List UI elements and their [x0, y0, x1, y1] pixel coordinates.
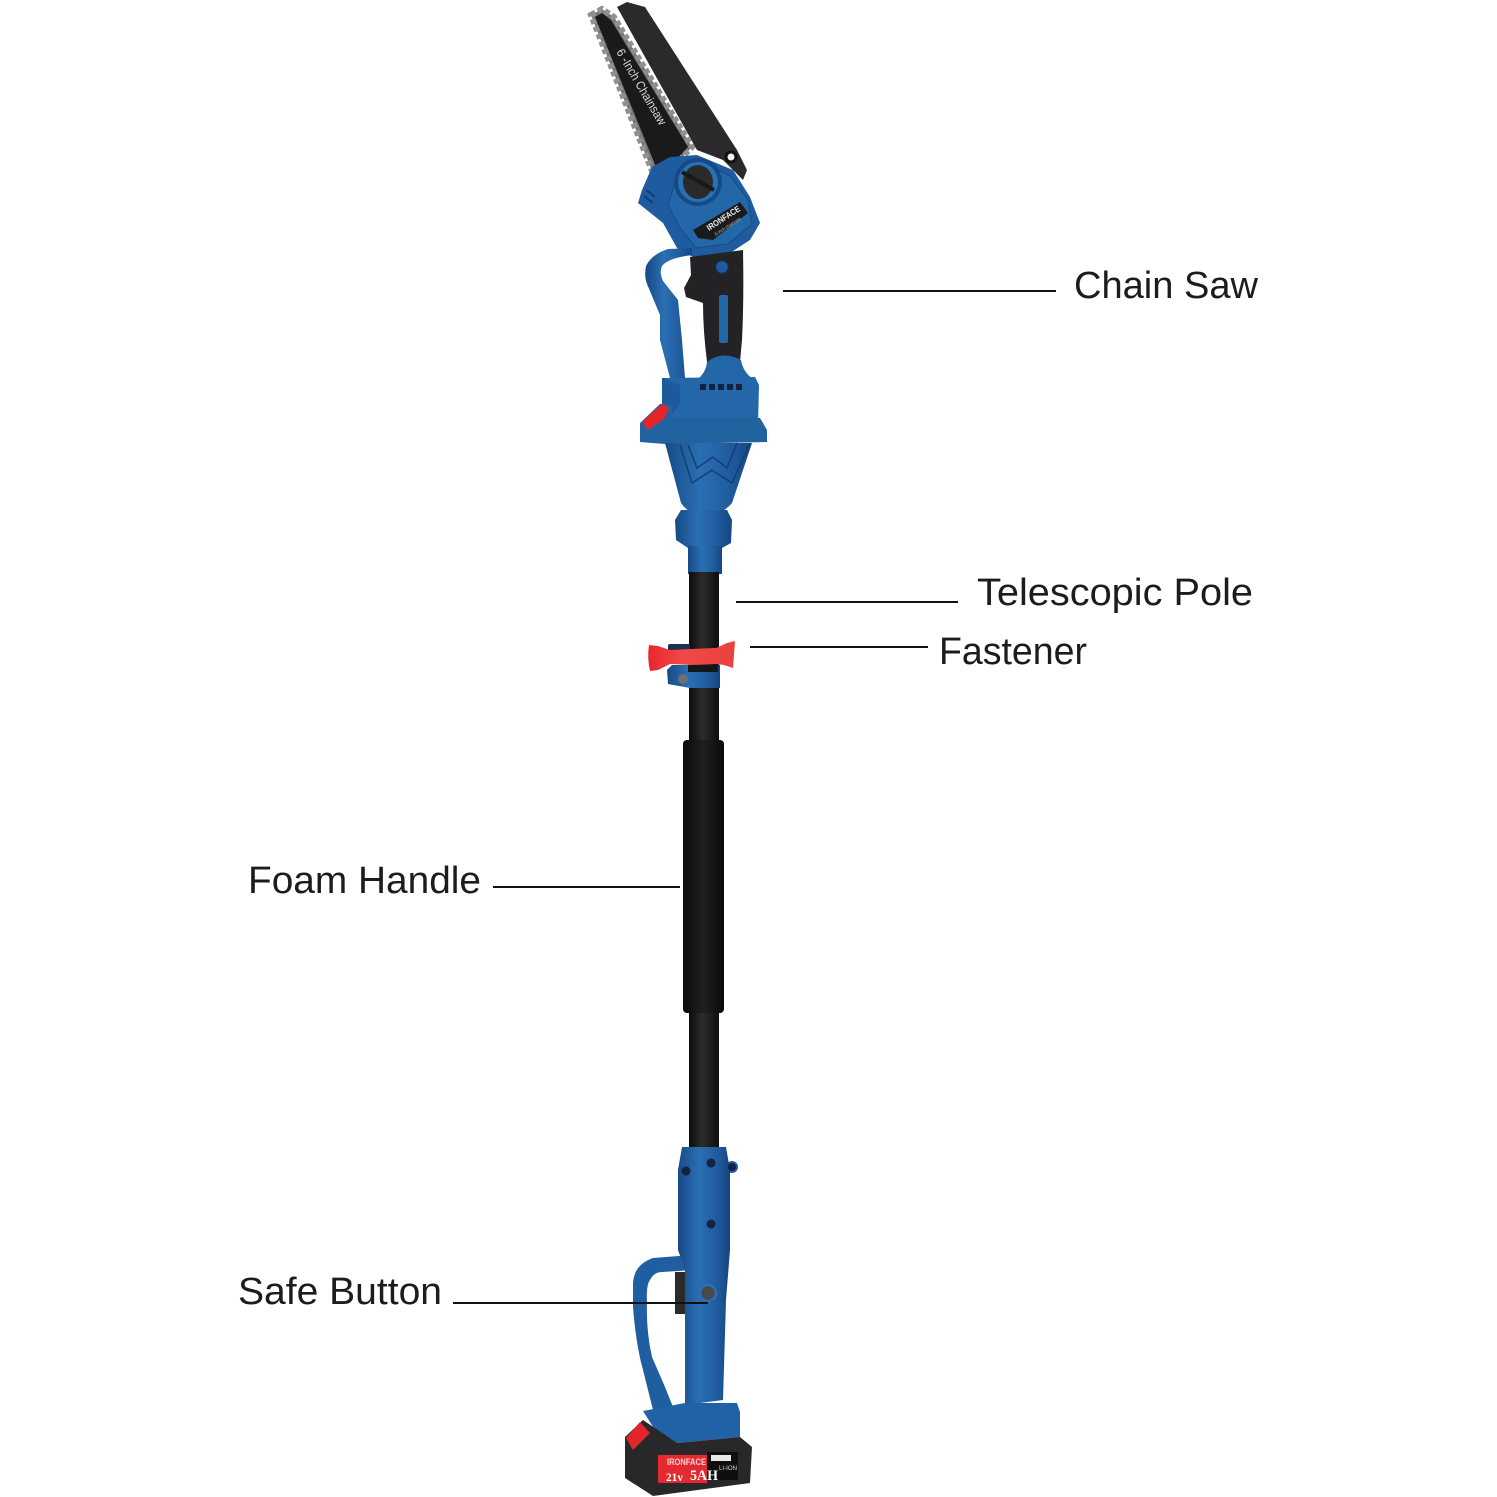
neck: [688, 546, 722, 574]
label text: brand: IRONFACE: [667, 1457, 706, 1467]
body tube: [678, 1147, 730, 1405]
red lever: [648, 641, 735, 671]
safe button: [700, 1285, 716, 1301]
handle grip: [684, 250, 753, 379]
brand plate: 6-Inch chainsaw: [714, 216, 743, 238]
battery: [625, 1420, 752, 1496]
callout: safe button: Safe Button: [238, 1271, 442, 1313]
callout: foam handle: Foam Handle: [248, 860, 481, 902]
housing panel: [668, 160, 752, 248]
fastener clamp: [648, 641, 735, 688]
callout: telescopic pole: Telescopic Pole: [977, 572, 1253, 614]
saw chain: [591, 9, 692, 178]
handle guard loop: [645, 248, 692, 378]
guide bar: [595, 13, 688, 175]
foam handle: [683, 740, 724, 1013]
W emblem: [680, 443, 750, 483]
motor housing: [638, 155, 760, 257]
grip blue inlay: [719, 295, 728, 343]
screw boss right: [726, 1161, 738, 1173]
battery body: [625, 1420, 752, 1496]
flange: [640, 404, 767, 444]
screw boss left: [678, 1163, 694, 1179]
battery adapter housing: [640, 377, 767, 574]
blue clamp: [667, 665, 720, 688]
vents: [644, 190, 655, 203]
upper clamp: [668, 644, 690, 652]
brand plate: IRONFACE: [705, 203, 742, 233]
knob: [674, 158, 722, 206]
vent slots: [700, 384, 742, 390]
guard pivot: [726, 152, 736, 162]
battery mount: [643, 1403, 740, 1443]
housing box: [662, 377, 759, 425]
lower handle: [633, 1147, 740, 1443]
power switch: [642, 404, 669, 430]
cone: [665, 443, 752, 516]
screw holes: [682, 1166, 690, 1176]
red label: [658, 1455, 707, 1483]
chainsaw head: [591, 2, 760, 257]
collar: [675, 510, 732, 548]
bar text: 6 -Inch Chainsaw: [613, 46, 670, 128]
blade guard: [617, 2, 747, 180]
callout: chain saw: Chain Saw: [1074, 265, 1259, 307]
label text: type: LI-ION: [719, 1466, 737, 1472]
safety trigger: [675, 1272, 687, 1314]
hand loop: [633, 1255, 694, 1410]
black label: [707, 1452, 738, 1480]
clamp bolt: [678, 674, 688, 684]
grip: [684, 250, 743, 362]
label text: voltage: 21v: [666, 1470, 683, 1484]
grip neck: [698, 355, 753, 379]
callout: fastener: Fastener: [939, 631, 1087, 673]
label text: capacity: 5AH: [690, 1468, 718, 1484]
grip bolt: [716, 261, 728, 273]
battery release: [626, 1422, 650, 1450]
charge gauge: [711, 1455, 731, 1461]
brand plate: [693, 202, 748, 240]
telescopic pole: [689, 572, 719, 1152]
